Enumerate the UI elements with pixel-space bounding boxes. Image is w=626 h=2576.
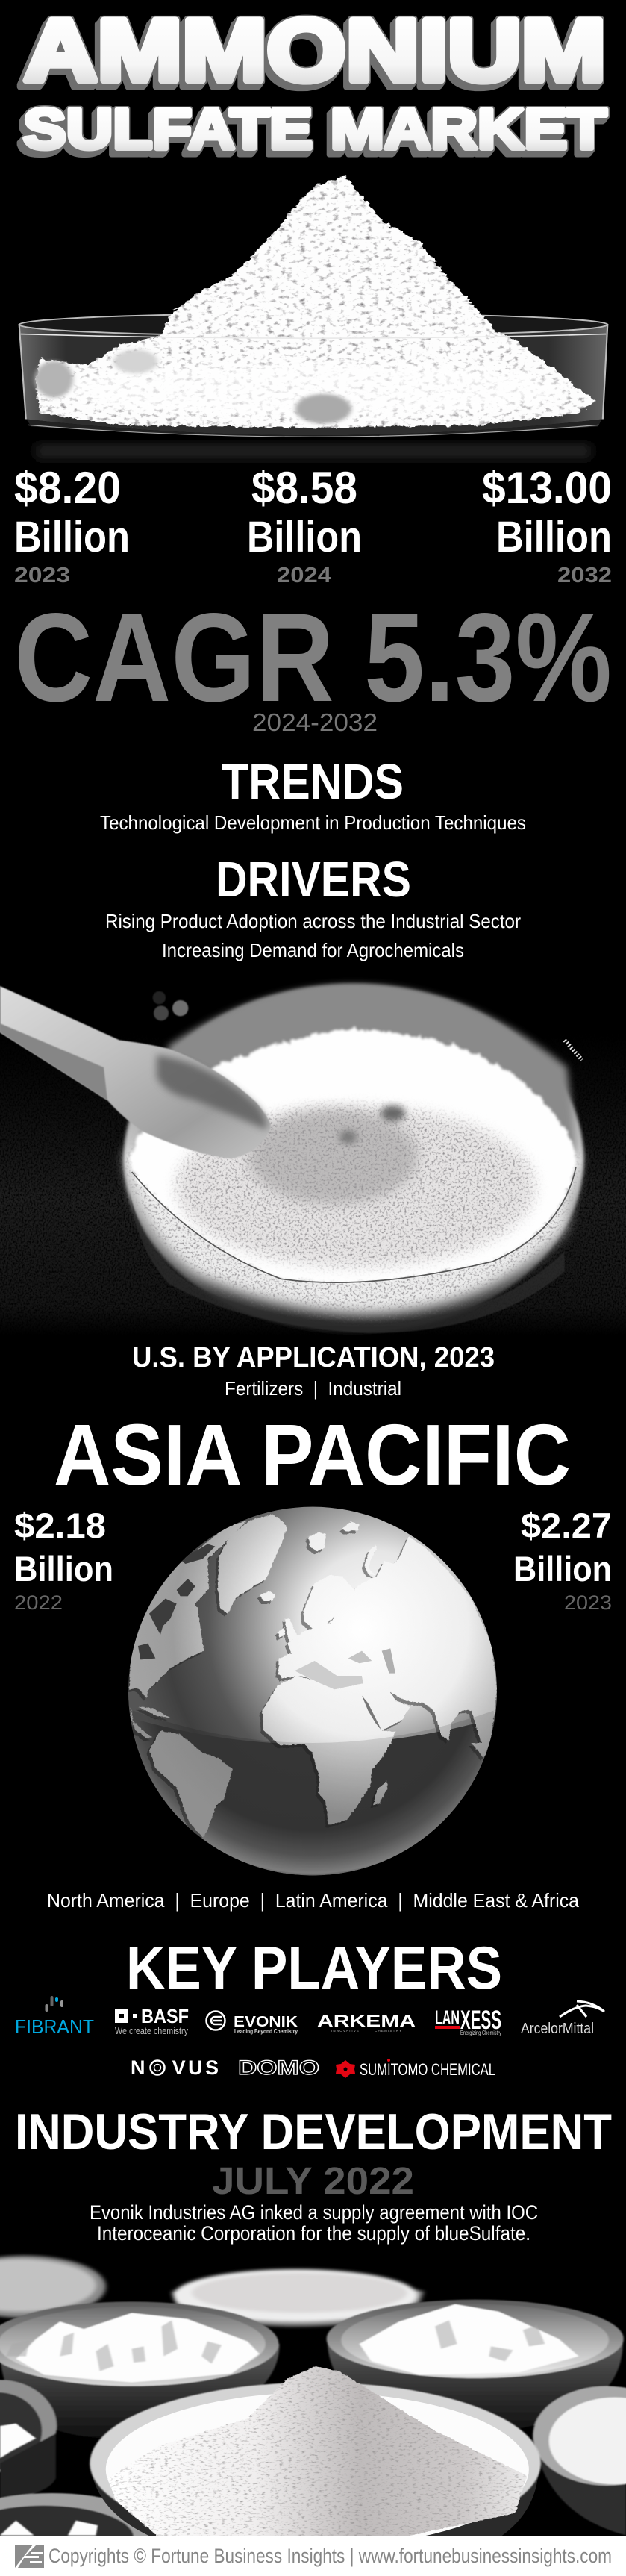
logo: Domo: DOMO [238, 2056, 319, 2079]
stat: Asia Pacific 2023: $2.27 [521, 1506, 612, 1545]
stat: 2023 market size: $8.20 [14, 463, 121, 513]
stat: 2032 market size: $13.00 [482, 463, 612, 513]
title [23, 1, 607, 161]
stat: 2032 market size: 2032 [557, 564, 612, 587]
logo: Lanxess: XESS [460, 2006, 501, 2035]
stat: Asia Pacific 2022: Billion [14, 1549, 113, 1588]
logo: Lanxess: Energizing Chemistry [460, 2030, 501, 2036]
title: SULFATE MARKET [23, 98, 607, 161]
logo: Arkema: CHEMISTRY [375, 2029, 401, 2033]
stat: Asia Pacific 2022: 2022 [14, 1591, 63, 1614]
logo: Lanxess: LAN [435, 2006, 460, 2029]
photo: powder pile in glass dish [19, 175, 607, 464]
logo: ArcelorMittal [521, 2001, 604, 2037]
key players heading: KEY PLAYERS [126, 1935, 502, 2002]
drivers [105, 852, 521, 961]
stat: 2023 market size: Billion [14, 513, 130, 561]
development text: Interoceanic Corporation for the supply of blueSulfate. [97, 2222, 530, 2245]
drivers: Rising Product Adoption across the Industrial Sector [105, 910, 521, 932]
center bowl [90, 2458, 539, 2540]
logo: BASF: We create chemistry [115, 2025, 188, 2036]
other regions: North America | Europe | Latin America | Middle East & Africa [47, 1889, 580, 1912]
stat: 2024 market size: Billion [247, 513, 362, 561]
U.S. by application: U.S. BY APPLICATION, 2023 [132, 1342, 495, 1373]
photo: spoon over powder dish [0, 984, 626, 1336]
logo: BASF: BASF [141, 2005, 189, 2027]
drivers: Increasing Demand for Agrochemicals [162, 939, 464, 961]
stat: 2024 market size [247, 463, 362, 587]
title: AMMONIUM [24, 1, 606, 100]
drivers: DRIVERS [216, 852, 411, 908]
stat: 2024 market size: 2024 [277, 564, 331, 587]
logo: Arkema: ARKEMA [317, 2012, 416, 2030]
stat: Asia Pacific 2022 [14, 1506, 113, 1614]
logo: Evonik: Leading Beyond Chemistry [234, 2028, 298, 2035]
globe [128, 1506, 497, 1875]
logo: Sumitomo Chemical: SUMITOMO CHEMICAL [360, 2060, 495, 2079]
stat: 2024 market size: $8.58 [251, 463, 357, 513]
stat: Asia Pacific 2023: Billion [513, 1549, 612, 1588]
stat: Asia Pacific 2022: $2.18 [14, 1506, 106, 1545]
land masses [129, 1514, 497, 1838]
logo: Arkema: INNOVATIVE [331, 2029, 359, 2033]
stat: 2023 market size [14, 463, 130, 587]
logo: Fibrant: FIBRANT [15, 2015, 94, 2038]
photo: bowls of powder [0, 2256, 626, 2570]
U.S. by application [132, 1342, 495, 1400]
logo: Evonik: EVONIK [234, 2014, 298, 2030]
logo: Lanxess [435, 2006, 501, 2036]
logo: Fibrant [15, 1996, 94, 2038]
stat: 2023 market size: 2023 [14, 564, 70, 587]
logo: Sumitomo Chemical [336, 2059, 495, 2079]
CAGR: 2024-2032 [252, 708, 378, 736]
U.S. by application: Fertilizers | Industrial [225, 1377, 401, 1400]
logo: Novus: N VUS [131, 2056, 219, 2079]
footer [0, 2536, 626, 2576]
stat: Asia Pacific 2023: 2023 [564, 1591, 612, 1614]
development text [90, 2201, 538, 2245]
spoon [0, 986, 271, 1158]
footer logo [15, 2545, 44, 2568]
logo: ArcelorMittal: ArcelorMittal [521, 2021, 594, 2037]
logo: BASF [115, 2005, 189, 2036]
stat: 2032 market size: Billion [496, 513, 612, 561]
trends [100, 754, 526, 834]
trends: TRENDS [222, 754, 404, 810]
stat: 2032 market size [482, 463, 612, 587]
region heading: ASIA PACIFIC [54, 1406, 571, 1503]
trends: Technological Development in Production Techniques [100, 811, 526, 834]
crystals [0, 2304, 579, 2536]
development text: Evonik Industries AG inked a supply agreement with IOC [90, 2201, 538, 2224]
development date: JULY 2022 [212, 2159, 414, 2202]
logo: Evonik [206, 2011, 298, 2035]
stat: Asia Pacific 2023 [513, 1506, 612, 1614]
logo: Arkema [317, 2012, 416, 2033]
